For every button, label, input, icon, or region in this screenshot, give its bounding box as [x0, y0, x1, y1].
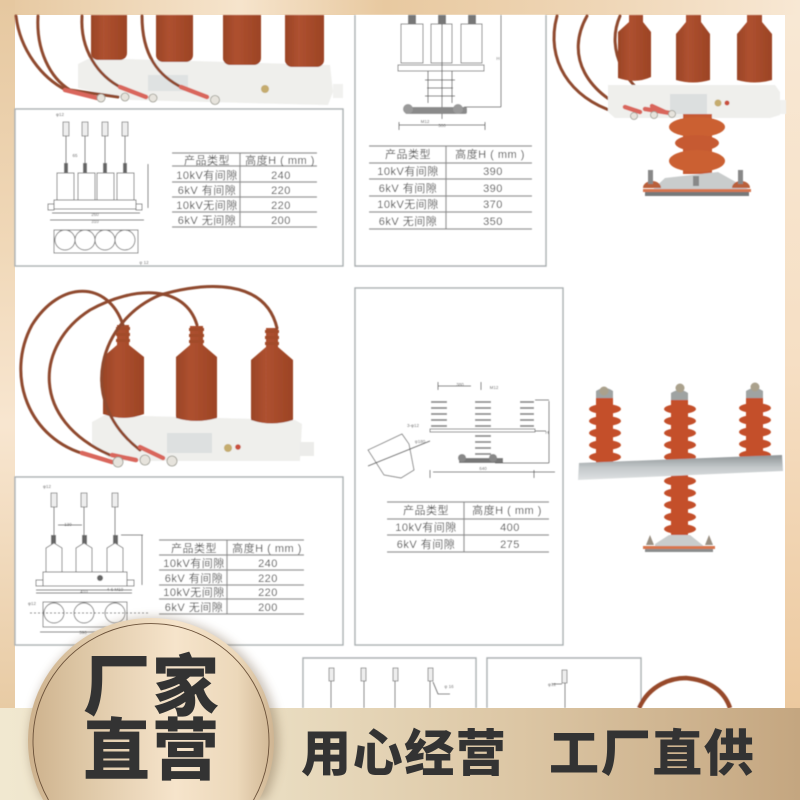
- table: bracket heights: 6kV 有间隙: [397, 537, 455, 551]
- table: four-column heights: 高度H ( mm ): [245, 153, 315, 167]
- drawing: four-column schematic: 310: [91, 219, 99, 224]
- table: post-mounted heights: 产品类型: [385, 147, 431, 161]
- table: four-column heights: 产品类型: [184, 153, 230, 167]
- panel: partial drawing, bottom centre: φ 16: [444, 684, 454, 689]
- table: four-column heights: 6kV 有间隙: [178, 183, 236, 197]
- slogan left: 用心经营: [301, 714, 507, 786]
- table: four-column heights: 220: [271, 200, 291, 212]
- drawing: post-mounted schematic: H: [496, 56, 500, 61]
- panel: partial drawing, bottom right: φ12: [548, 682, 556, 687]
- drawing: four-column schematic: [48, 112, 149, 265]
- drawing: post-mounted schematic: 300: [438, 123, 446, 128]
- panel: three-column drawing and table: [15, 477, 343, 645]
- table: three-column heights: 220: [258, 587, 278, 599]
- table: three-column heights: 220: [258, 573, 278, 585]
- badge text: 厂家: [83, 650, 221, 725]
- table: bracket heights: 275: [500, 539, 520, 551]
- table: bracket heights: [387, 502, 549, 552]
- table: post-mounted heights: 390: [483, 166, 503, 178]
- drawing: bracket schematic: 380: [456, 382, 464, 387]
- table: three-column heights: 200: [258, 602, 278, 614]
- table: four-column heights: 220: [271, 185, 291, 197]
- table: post-mounted heights: 10kV无间隙: [377, 197, 439, 211]
- table: three-column heights: 产品类型: [171, 541, 217, 555]
- table: four-column heights: 10kV无间隙: [176, 198, 238, 212]
- table: three-column heights: [159, 540, 304, 614]
- drawing: three-column schematic: φ12: [28, 601, 36, 606]
- drawing: bracket schematic: H: [545, 430, 549, 435]
- badge text: [83, 650, 221, 789]
- table: bracket heights: 400: [500, 522, 520, 534]
- drawing: three-column schematic: φ12: [43, 484, 51, 489]
- drawing: four-column schematic: φ 12: [139, 260, 149, 265]
- drawing: bracket schematic: [368, 382, 555, 478]
- table: post-mounted heights: 350: [483, 216, 503, 228]
- table: post-mounted heights: [369, 146, 532, 229]
- product photo: three-column surge protector: [21, 287, 314, 467]
- drawing: bracket schematic: 3-φ12: [407, 423, 419, 428]
- badge: 厂家直营: [28, 618, 279, 800]
- product photo: four-column surge protector: [16, 15, 343, 105]
- table: post-mounted heights: 370: [483, 199, 503, 211]
- table: bracket heights: 10kV有间隙: [395, 520, 457, 534]
- slogan right: 工厂直供: [549, 714, 755, 786]
- drawing: three-column schematic: 390: [79, 630, 87, 635]
- table: three-column heights: 10kV有间隙: [163, 556, 225, 570]
- drawing: three-column schematic: [28, 484, 150, 635]
- drawing: bracket schematic: 640: [479, 466, 487, 471]
- bottom banner: [0, 708, 800, 800]
- table: three-column heights: 6kV 有间隙: [165, 571, 223, 585]
- drawing: three-column schematic: 410: [80, 589, 88, 594]
- table: three-column heights: 240: [258, 558, 278, 570]
- product photo: post-mounted surge protector: [554, 15, 786, 196]
- drawing: post-mounted schematic: [398, 15, 501, 130]
- table: three-column heights: 10kV无间隙: [163, 585, 225, 599]
- table: four-column heights: [172, 153, 317, 227]
- drawing: four-column schematic: 65: [72, 153, 78, 158]
- badge text: 直营: [83, 714, 221, 789]
- table: four-column heights: 10kV有间隙: [176, 168, 238, 182]
- drawing: three-column schematic: 4-6 M10: [107, 587, 124, 592]
- panel: bracket drawing and table: [355, 288, 563, 645]
- drawing: post-mounted schematic: M12: [421, 119, 430, 124]
- product photo: partial wire loop: [639, 678, 730, 708]
- table: post-mounted heights: 6kV 无间隙: [379, 214, 437, 228]
- table: post-mounted heights: 高度H ( mm ): [455, 147, 525, 161]
- drawing: bracket schematic: φ180: [415, 439, 426, 444]
- table: four-column heights: 240: [271, 170, 291, 182]
- panel: partial drawing, bottom right: [487, 658, 641, 708]
- drawing: four-column schematic: φ12: [56, 112, 64, 117]
- panel: four-column drawing and table: [15, 109, 343, 266]
- table: post-mounted heights: 10kV有间隙: [377, 164, 439, 178]
- table: four-column heights: 6kV 无间隙: [178, 213, 236, 227]
- drawing: bracket schematic: M12: [490, 385, 499, 390]
- panel: post-mounted drawing and table: [355, 15, 546, 266]
- drawing: four-column schematic: 260: [91, 212, 99, 217]
- table: post-mounted heights: 6kV 有间隙: [379, 181, 437, 195]
- table: post-mounted heights: 390: [483, 183, 503, 195]
- product photo: bracket-mounted surge arresters: [578, 382, 783, 552]
- table: bracket heights: 产品类型: [403, 503, 449, 517]
- table: three-column heights: 6kV 无间隙: [165, 600, 223, 614]
- panel: partial drawing, bottom centre: [303, 658, 476, 708]
- table: three-column heights: 高度H ( mm ): [232, 541, 302, 555]
- table: four-column heights: 200: [271, 215, 291, 227]
- table: bracket heights: 高度H ( mm ): [472, 503, 542, 517]
- drawing: three-column schematic: 130: [64, 522, 72, 527]
